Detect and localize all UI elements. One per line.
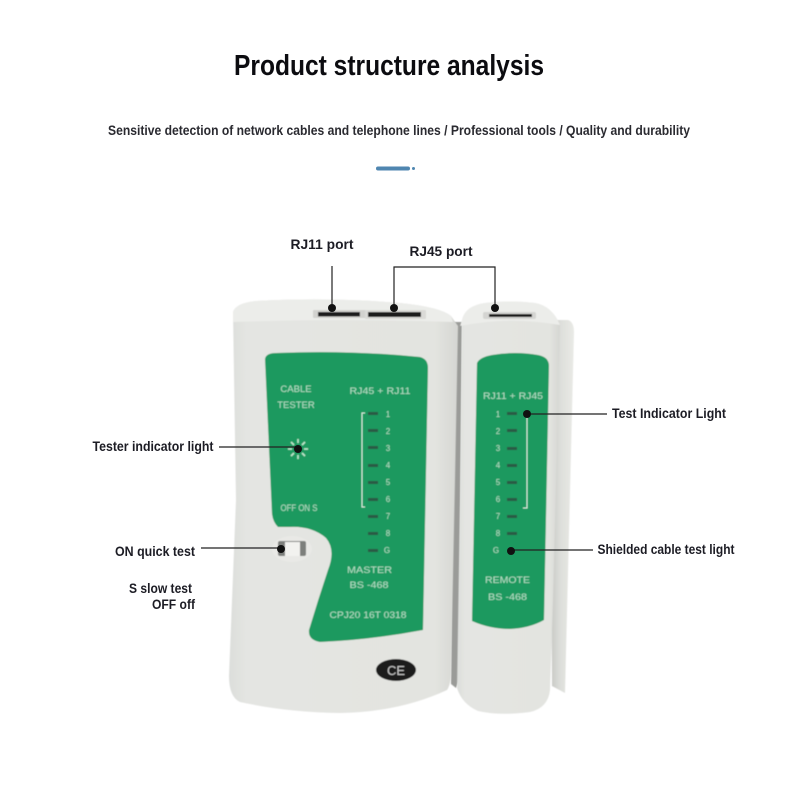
tester light rays — [288, 439, 308, 459]
label: S slow test, OFF off: OFF off — [152, 596, 195, 612]
label: RJ45 port — [390, 243, 499, 312]
bracket master — [362, 413, 365, 507]
master model text: CPJ20 16T 0318 — [330, 610, 406, 621]
remote socket — [483, 312, 536, 319]
master body — [229, 299, 458, 713]
CE mark: CE — [387, 663, 405, 678]
remote LEDs: 6 — [496, 495, 501, 504]
remote top ledge — [460, 302, 560, 326]
cable tester label — [277, 384, 315, 411]
title: Product structure analysis — [234, 50, 544, 82]
remote LEDs — [493, 410, 517, 555]
label: shielded cable test light — [507, 541, 735, 557]
remote LEDs: 2 — [496, 427, 501, 436]
label: tester indicator light — [92, 438, 302, 454]
remote model text: BS -468 — [488, 592, 527, 603]
master LEDs: 2 — [386, 427, 391, 436]
label: test indicator light — [523, 405, 726, 421]
remote model text: REMOTE — [485, 575, 530, 586]
remote LEDs: 4 — [496, 461, 501, 470]
CE mark — [376, 659, 416, 681]
remote side rail — [550, 320, 574, 693]
master model text: MASTER — [347, 565, 392, 576]
master LEDs: 4 — [386, 461, 391, 470]
master LEDs: 6 — [386, 495, 391, 504]
master LEDs: 3 — [386, 444, 391, 453]
remote model text — [485, 575, 530, 603]
cable tester label: TESTER — [277, 400, 315, 411]
remote body — [457, 302, 560, 714]
cable tester label: CABLE — [280, 384, 312, 395]
master LEDs: 8 — [386, 529, 391, 538]
remote LEDs: 1 — [496, 410, 501, 419]
RJ header remote: RJ11 + RJ45 — [483, 391, 543, 402]
switch labels: OFF ON S — [280, 503, 318, 514]
master LEDs: 7 — [386, 512, 391, 521]
remote LEDs: 5 — [496, 478, 501, 487]
master tester unit — [229, 299, 458, 713]
RJ45 socket — [365, 310, 426, 319]
subtitle: Sensitive detection of network cables and telephone lines / Professional tools / Quality and durability — [108, 122, 690, 138]
slide switch — [272, 536, 312, 562]
master model text: BS -468 — [350, 580, 388, 591]
label: tester indicator light: Tester indicator light — [92, 438, 214, 454]
master top ledge — [233, 299, 453, 322]
gap shadow between units — [451, 322, 462, 688]
master LEDs — [368, 410, 391, 555]
remote LEDs: 3 — [496, 444, 501, 453]
label: RJ11 port: RJ11 port — [290, 236, 354, 252]
master LEDs: G — [384, 546, 390, 555]
master LEDs: 1 — [386, 410, 391, 419]
remote unit — [457, 302, 574, 714]
accent bar — [376, 166, 415, 170]
master LEDs: 5 — [386, 478, 391, 487]
label: ON quick test — [115, 543, 285, 559]
remote LEDs: 8 — [496, 529, 501, 538]
RJ11 socket — [313, 310, 366, 318]
label: shielded cable test light: Shielded cable test light — [598, 541, 735, 557]
remote LEDs: G — [493, 546, 499, 555]
remote LEDs: 7 — [496, 512, 501, 521]
label: S slow test, OFF off — [129, 580, 195, 612]
label: S slow test, OFF off: S slow test — [129, 580, 192, 596]
RJ header master: RJ45 + RJ11 — [350, 386, 410, 397]
master model text — [330, 565, 406, 621]
label: test indicator light: Test Indicator Light — [612, 405, 726, 421]
remote green panel — [472, 353, 549, 629]
label: RJ45 port: RJ45 port — [410, 243, 473, 259]
master green panel — [265, 352, 428, 642]
label: ON quick test: ON quick test — [115, 543, 195, 559]
bracket remote — [523, 414, 527, 508]
label: RJ11 port — [290, 236, 354, 312]
